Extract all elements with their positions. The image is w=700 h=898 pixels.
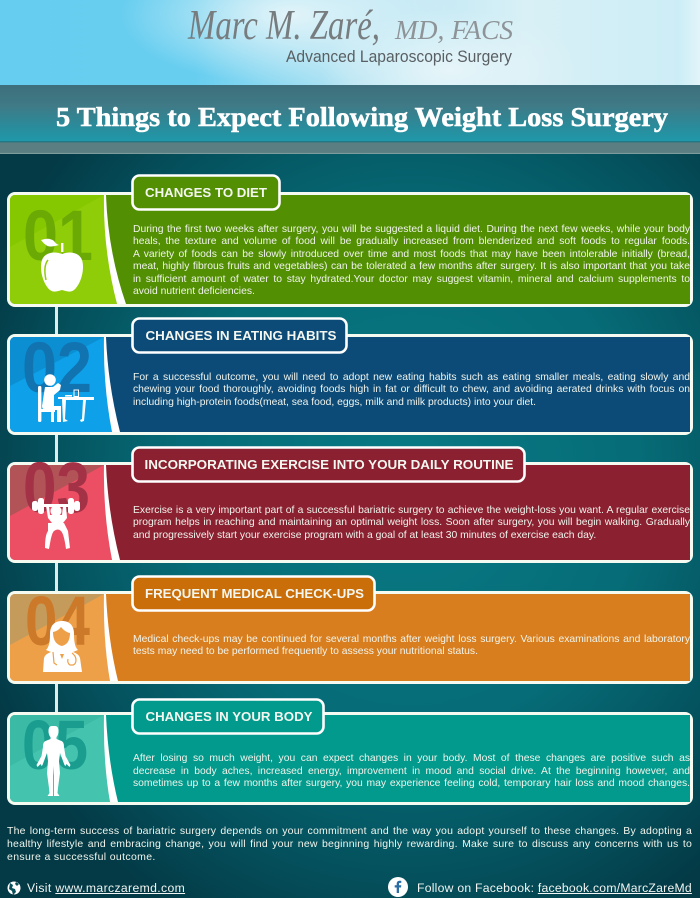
heading: changes to diet: CHANGES TO DIET — [145, 185, 267, 200]
title band — [0, 85, 700, 154]
heading: changes in your body — [132, 700, 324, 734]
closing paragraph — [7, 825, 692, 863]
panel 4: medical check-ups — [7, 575, 693, 684]
panel 1 text: meat, highly fibrous fruits and vegetables) can be tolerated a few months after surgery. It is also important that you take — [133, 261, 690, 272]
heading: changes in eating habits — [132, 318, 346, 352]
panel 2 text: including high-protein foods(meat, sea food, eggs, milk and milk products) into your diet. — [133, 396, 536, 408]
icon: apple — [41, 239, 83, 292]
panel 3 text: program helps in reaching and maintaining an optimal weight loss. Soon after surgery, you will begin walking. Gradually — [133, 517, 690, 528]
panel 2 text — [133, 372, 690, 408]
icon: doctor — [43, 621, 82, 672]
footer: website link: Visit www.marczaremd.com — [27, 880, 185, 894]
logo subtitle: Advanced Laparoscopic Surgery — [286, 48, 513, 66]
number 03: 03 — [23, 449, 90, 528]
heading: incorporating exercise: INCORPORATING EXERCISE INTO YOUR DAILY ROUTINE — [144, 457, 514, 472]
footer: facebook link — [388, 877, 692, 897]
logo signature: Marc M. Zaré, — [187, 3, 380, 49]
heading: changes to diet — [132, 176, 280, 210]
panel 5 text — [133, 753, 690, 789]
panel 4 text: Medical check-ups may be continued for several months after weight loss surgery. Various examinations and laboratory — [133, 634, 690, 644]
panel 3 text: and progressively start your exercise program with a goal of at least 30 minutes of exercise each day. — [133, 530, 596, 540]
panel 5 text: sometimes up to a few months after surgery, you may experience feeling cold, temporary hair loss and mood changes. — [133, 778, 690, 789]
panel 4 text: tests may need to be performed frequently to assess your nutritional status. — [133, 646, 478, 657]
icon: human body — [36, 726, 70, 796]
header banner — [0, 0, 700, 85]
panel 2: eating habits — [7, 317, 693, 435]
panel 3 text — [133, 504, 690, 540]
closing paragraph: The long-term success of bariatric surgery depends on your commitment and the way you adopt yourself to these changes. By adopting a — [7, 825, 692, 837]
number 02: 02 — [22, 329, 92, 408]
panel 1 text: avoid nutrient deficiencies. — [133, 286, 255, 297]
footer: facebook link: Follow on Facebook: facebook.com/MarcZareMd — [417, 880, 692, 894]
logo signature: MD, FACS — [394, 15, 513, 45]
heading: incorporating exercise — [132, 448, 524, 482]
connector line — [55, 305, 58, 715]
panel 5 text: After losing so much weight, you can expect changes in your body. Most of these changes are positive such as — [133, 753, 690, 764]
panel 3: exercise — [7, 446, 693, 563]
number 04: 04 — [25, 582, 90, 660]
title: 5 Things to Expect Following Weight Loss Surgery — [56, 102, 669, 132]
panel 1 text — [133, 224, 690, 297]
panel 1 text: A variety of foods can be slowly introduced over time and most foods that may have been intolerable initially (bread, — [133, 248, 690, 260]
icon: facebook — [388, 877, 408, 897]
heading: changes in your body: CHANGES IN YOUR BODY — [146, 709, 313, 724]
panel 1: changes to diet — [7, 174, 693, 307]
heading: frequent medical check-ups: FREQUENT MEDICAL CHECK-UPS — [145, 586, 364, 601]
closing paragraph: ensure a successful outcome. — [7, 851, 156, 863]
panel 1 text: During the first two weeks after surgery, you will be suggested a liquid diet. During the next few weeks, while your body — [133, 224, 690, 234]
closing paragraph: healthy lifestyle and embracing change, you will find your new beginning highly rewarding. Make sure to discuss any concerns with us to — [7, 838, 692, 850]
number 01: 01 — [23, 197, 93, 276]
panel 5 text: decrease in body aches, increased energy, improvement in mood and social drive. At the beginning however, and — [133, 766, 690, 776]
panel 1 text: heals, the texture and volume of food will be gradually increased from blenderized and soft foods to regular foods. — [133, 236, 690, 247]
heading: changes in eating habits: CHANGES IN EATING HABITS — [146, 328, 337, 343]
icon: weight lifter — [32, 498, 80, 549]
panel 3 text: Exercise is a very important part of a successful bariatric surgery to achieve the weight-loss you want. A regular exercise — [133, 504, 690, 516]
heading: frequent medical check-ups — [132, 576, 374, 610]
icon: person at table — [38, 374, 94, 422]
panel 4 text — [133, 634, 690, 657]
panel 5: changes in your body — [7, 698, 693, 805]
icon: globe — [8, 882, 20, 895]
panel 1 text: in sufficient amount of water to stay hydrated.Your doctor may suggest vitamin, mineral and calcium supplements to — [133, 274, 690, 284]
number 05: 05 — [22, 706, 88, 784]
panel 2 text: chewing your food thoroughly, avoiding foods high in fat or difficult to chew, and avoiding aerated drinks with focus on — [133, 384, 690, 395]
panel 2 text: For a successful outcome, you will need to adopt new eating habits such as eating smaller meals, eating slowly and — [133, 372, 690, 382]
